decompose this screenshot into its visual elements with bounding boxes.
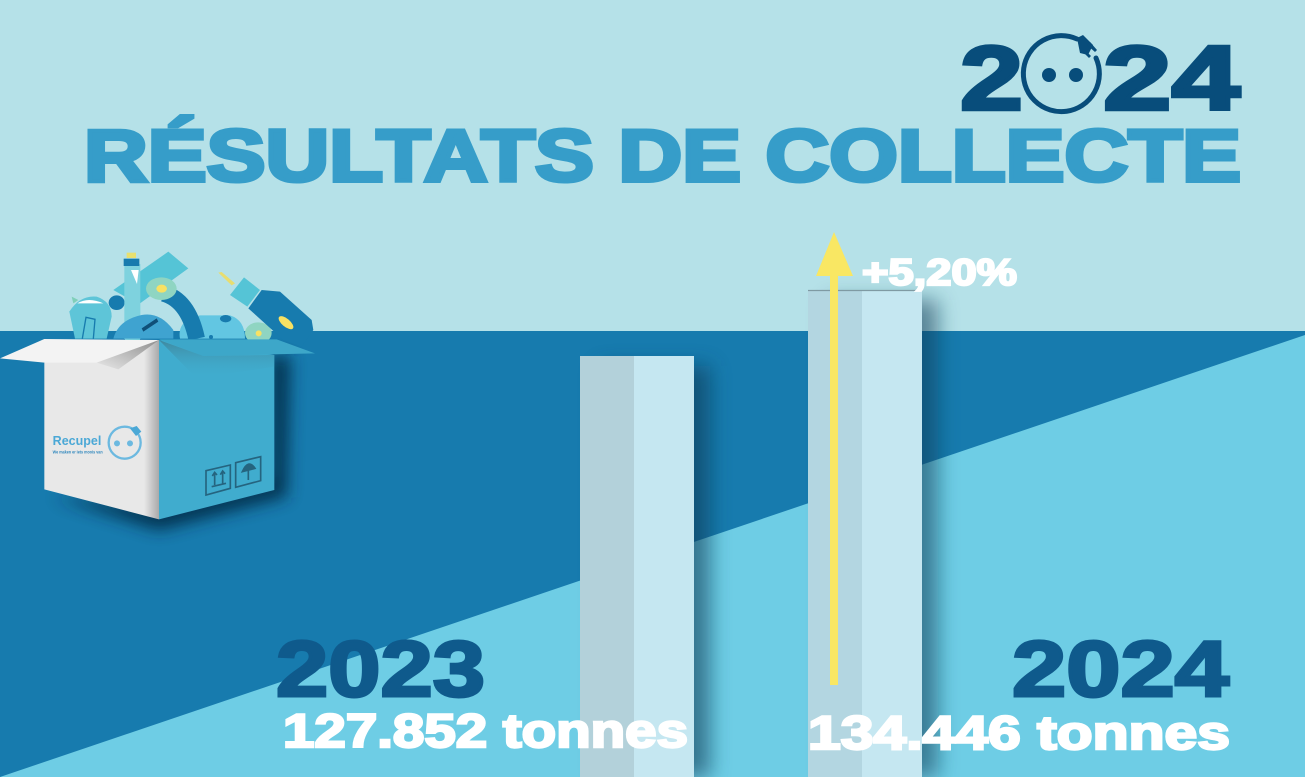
growth percentage: +5,20% xyxy=(862,252,1017,293)
illustration: Recupel box with appliances xyxy=(0,252,315,530)
title: RÉSULTATS DE COLLECTE xyxy=(84,116,1241,197)
box left face xyxy=(44,340,159,519)
label: 2024: 2024 xyxy=(1012,624,1229,713)
background: upper light band xyxy=(0,0,1305,332)
year heading 2024 with plug socket: 2 xyxy=(960,28,1023,130)
year heading 2024 with plug socket xyxy=(960,28,1241,130)
label: 2024 xyxy=(808,624,1230,759)
bar 2023 xyxy=(580,356,710,777)
year heading 2024 with plug socket: 24 xyxy=(1103,28,1241,130)
background: light blue diagonal xyxy=(0,335,1305,777)
appliances xyxy=(69,252,272,344)
value: 2023 tonnage: 127.852 tonnes xyxy=(283,704,688,757)
background: dark blue band xyxy=(0,331,1305,777)
logo: Recupel: Recupel xyxy=(53,434,101,448)
appliance: drill xyxy=(218,272,313,347)
icon: socket as zero xyxy=(1023,35,1099,112)
box right face xyxy=(159,340,274,519)
logo: Recupel: We maken er iets moois van xyxy=(53,449,103,454)
label: 2023 xyxy=(276,624,688,757)
value: 2024 tonnage: 134.446 tonnes xyxy=(808,706,1230,759)
logo: Recupel xyxy=(53,426,141,459)
arrow: growth xyxy=(816,232,853,685)
box shadow xyxy=(53,355,290,530)
icon: this way up xyxy=(206,465,230,495)
label: 2023: 2023 xyxy=(276,624,485,713)
icon: keep dry xyxy=(236,457,261,487)
box left flap xyxy=(0,339,159,363)
box right flap xyxy=(159,339,315,356)
bar 2024 xyxy=(808,290,938,777)
